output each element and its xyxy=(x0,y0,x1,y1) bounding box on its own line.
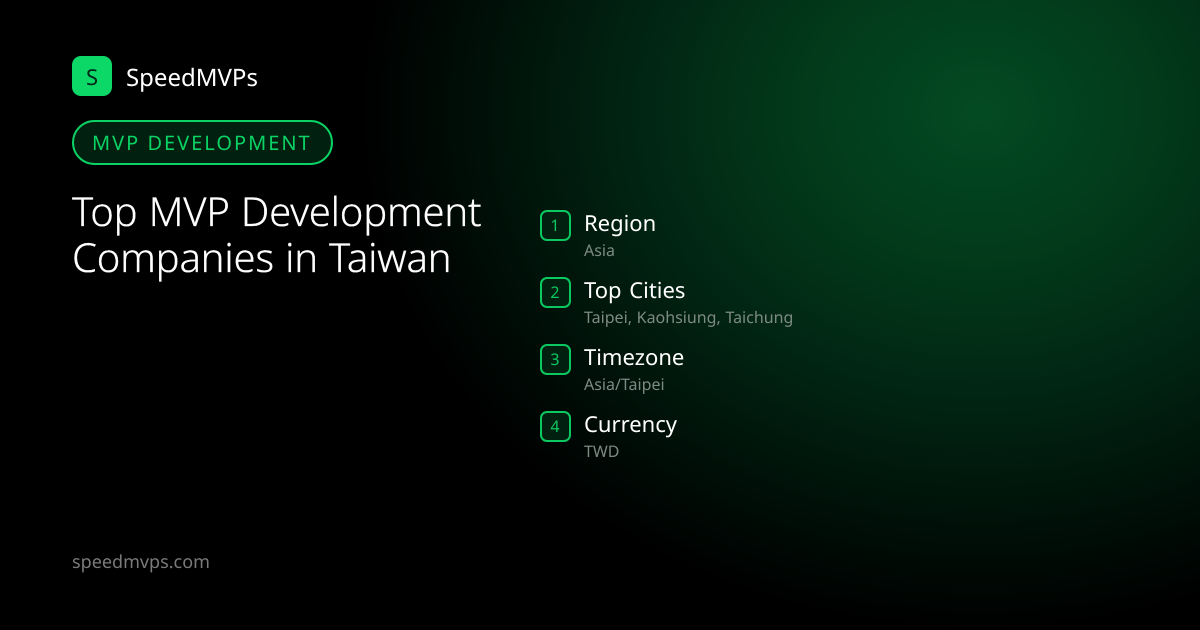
number badge 4: 4 xyxy=(550,415,560,437)
list item: currency xyxy=(540,409,677,462)
category badge: MVP DEVELOPMENT xyxy=(92,129,312,156)
number badge 4 xyxy=(540,411,571,442)
title: Top MVP Development xyxy=(72,183,481,238)
list item: top cities xyxy=(540,275,793,328)
label: Timezone xyxy=(584,342,684,372)
list item: timezone xyxy=(540,342,684,395)
icon: logo xyxy=(72,56,112,96)
number badge 2: 2 xyxy=(550,281,560,303)
number badge 1: 1 xyxy=(550,214,560,236)
value: Asia xyxy=(584,239,615,261)
list item: region xyxy=(540,208,656,261)
category badge xyxy=(72,120,333,165)
label: Currency xyxy=(584,409,677,439)
number badge 3 xyxy=(540,344,571,375)
label: Top Cities xyxy=(584,275,685,305)
number badge 2 xyxy=(540,277,571,308)
title xyxy=(72,183,481,284)
value: Asia/Taipei xyxy=(584,373,665,395)
value: TWD xyxy=(584,440,619,462)
value: Taipei, Kaohsiung, Taichung xyxy=(584,306,793,328)
number badge 3: 3 xyxy=(550,348,560,370)
brand name: SpeedMVPs xyxy=(126,61,258,94)
title: Companies in Taiwan xyxy=(72,229,451,284)
number badge 1 xyxy=(540,210,571,241)
label: Region xyxy=(584,208,656,238)
icon: logo: S xyxy=(86,62,98,92)
footer url: speedmvps.com xyxy=(72,550,210,574)
